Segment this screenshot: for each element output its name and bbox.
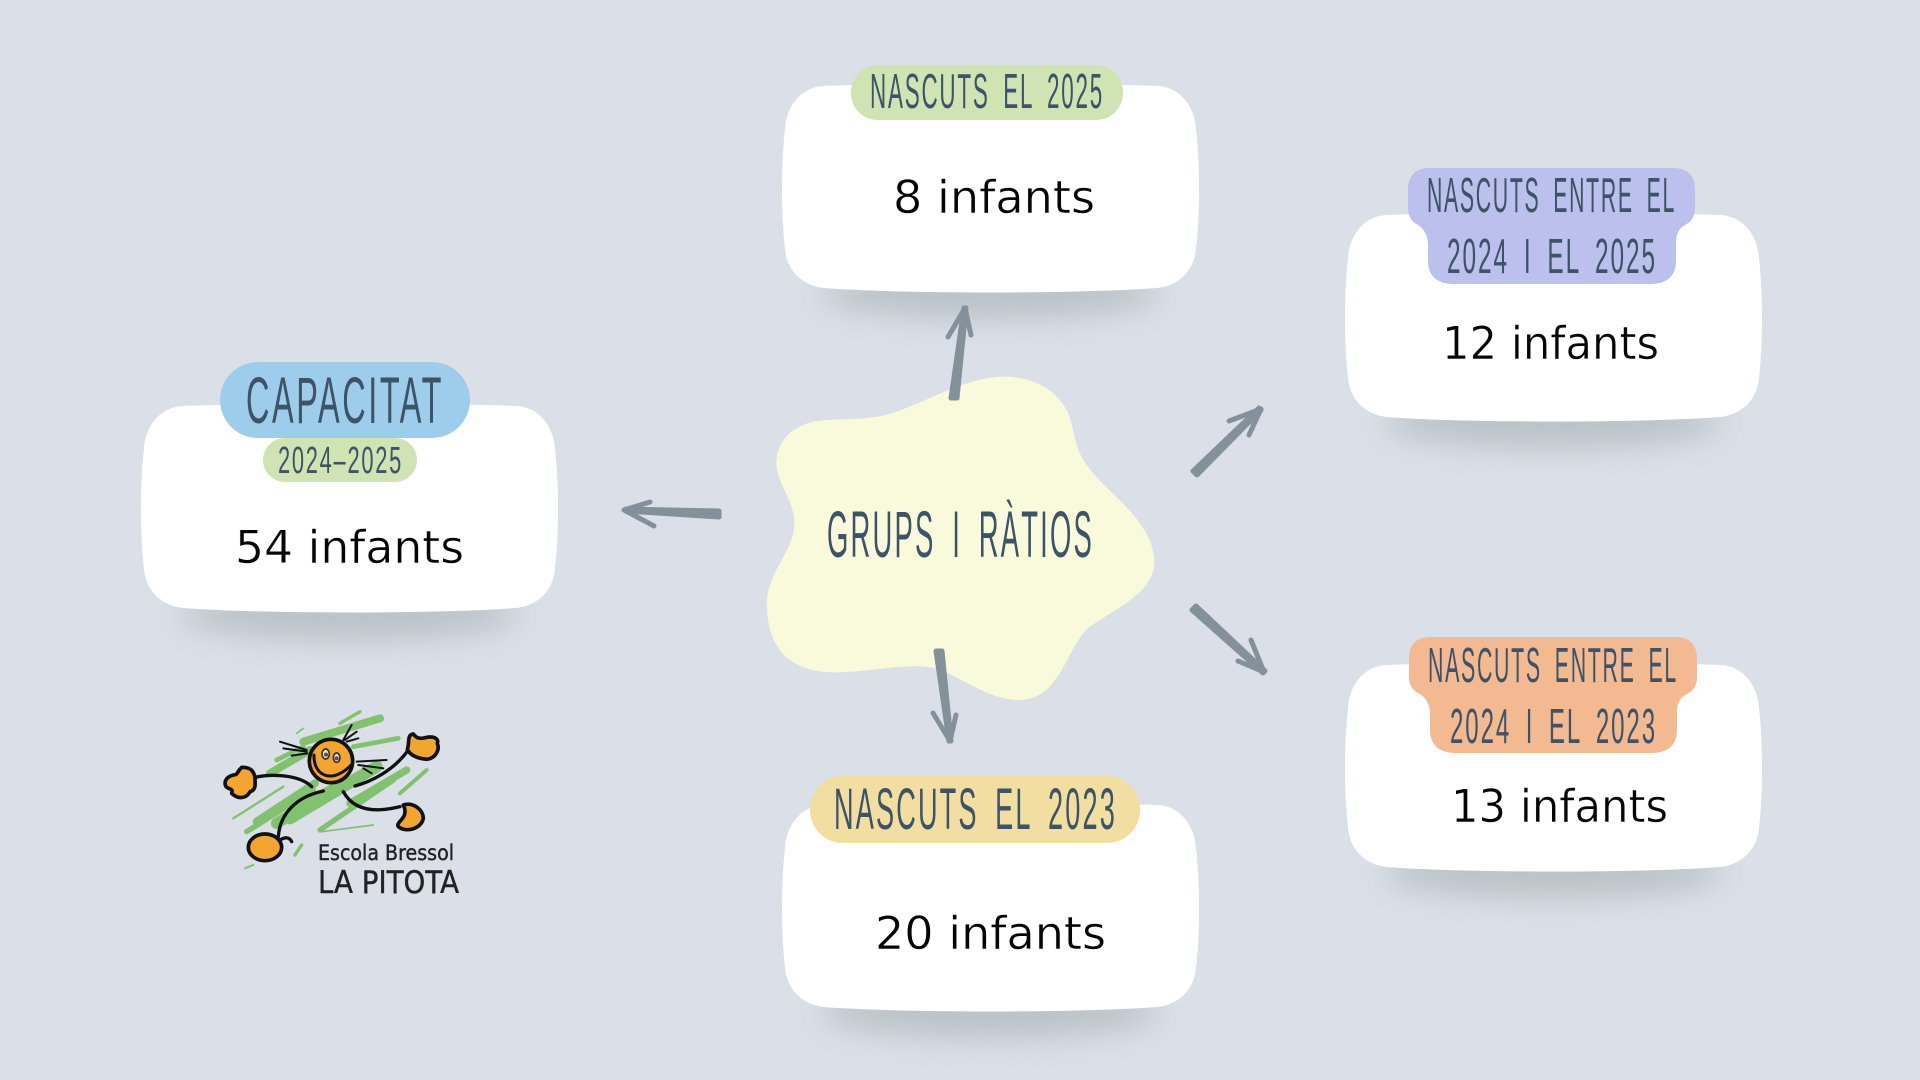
logo: escola bressol la pitota [225,712,459,901]
heading pill: nascuts entre 2024 i 2025 [1408,168,1695,284]
logo text [318,841,459,901]
logo text: LA PITOTA [318,865,459,901]
arrow: to nascuts el 2025 [948,308,971,398]
value: 20 infants: 20 infants [875,907,1106,960]
sub-heading pill: course year: 2024–2025 [278,440,403,482]
panel: nascuts entre 2024 i 2025 [1345,168,1762,448]
central blob: grups i ràtios [767,377,1154,700]
logo text: Escola Bressol [318,841,454,865]
arrow: to capacitat [624,502,719,526]
value: 12 infants: 12 infants [1442,317,1659,370]
heading pill: capacitat: CAPACITAT [246,363,444,437]
value: 13 infants: 13 infants [1451,780,1668,833]
value: 54 infants: 54 infants [235,521,464,574]
arrow: to nascuts entre 2024 i 2023 [1192,606,1265,673]
heading pill: nascuts el 2025 [851,65,1123,120]
panel: nascuts el 2025: NASCUTS EL 2025 [870,65,1104,119]
icon: pitota character [225,712,438,868]
panel: nascuts el 2025 [782,65,1199,319]
arrow: to nascuts entre 2024 i 2025 [1193,408,1261,475]
panel: nascuts el 2023 [782,776,1199,1038]
arrow: to nascuts el 2023 [933,651,956,741]
heading pill: nascuts el 2023 [810,776,1140,843]
value: 8 infants: 8 infants [893,171,1095,224]
heading pill: nascuts entre 2024 i 2025: 2024 I EL 2025 [1447,230,1657,284]
panel: capacitat [141,362,558,640]
heading pill: capacitat [220,362,470,438]
sub-heading pill: course year [263,438,417,482]
heading pill: nascuts el 2023: NASCUTS EL 2023 [834,777,1117,842]
heading pill: nascuts entre 2024 i 2023: 2024 I EL 2023 [1450,700,1657,754]
heading pill: nascuts entre 2024 i 2023 [1409,637,1697,754]
central blob: grups i ràtios: GRUPS I RÀTIOS [827,497,1094,571]
panel: nascuts entre 2024 i 2023 [1345,637,1762,898]
